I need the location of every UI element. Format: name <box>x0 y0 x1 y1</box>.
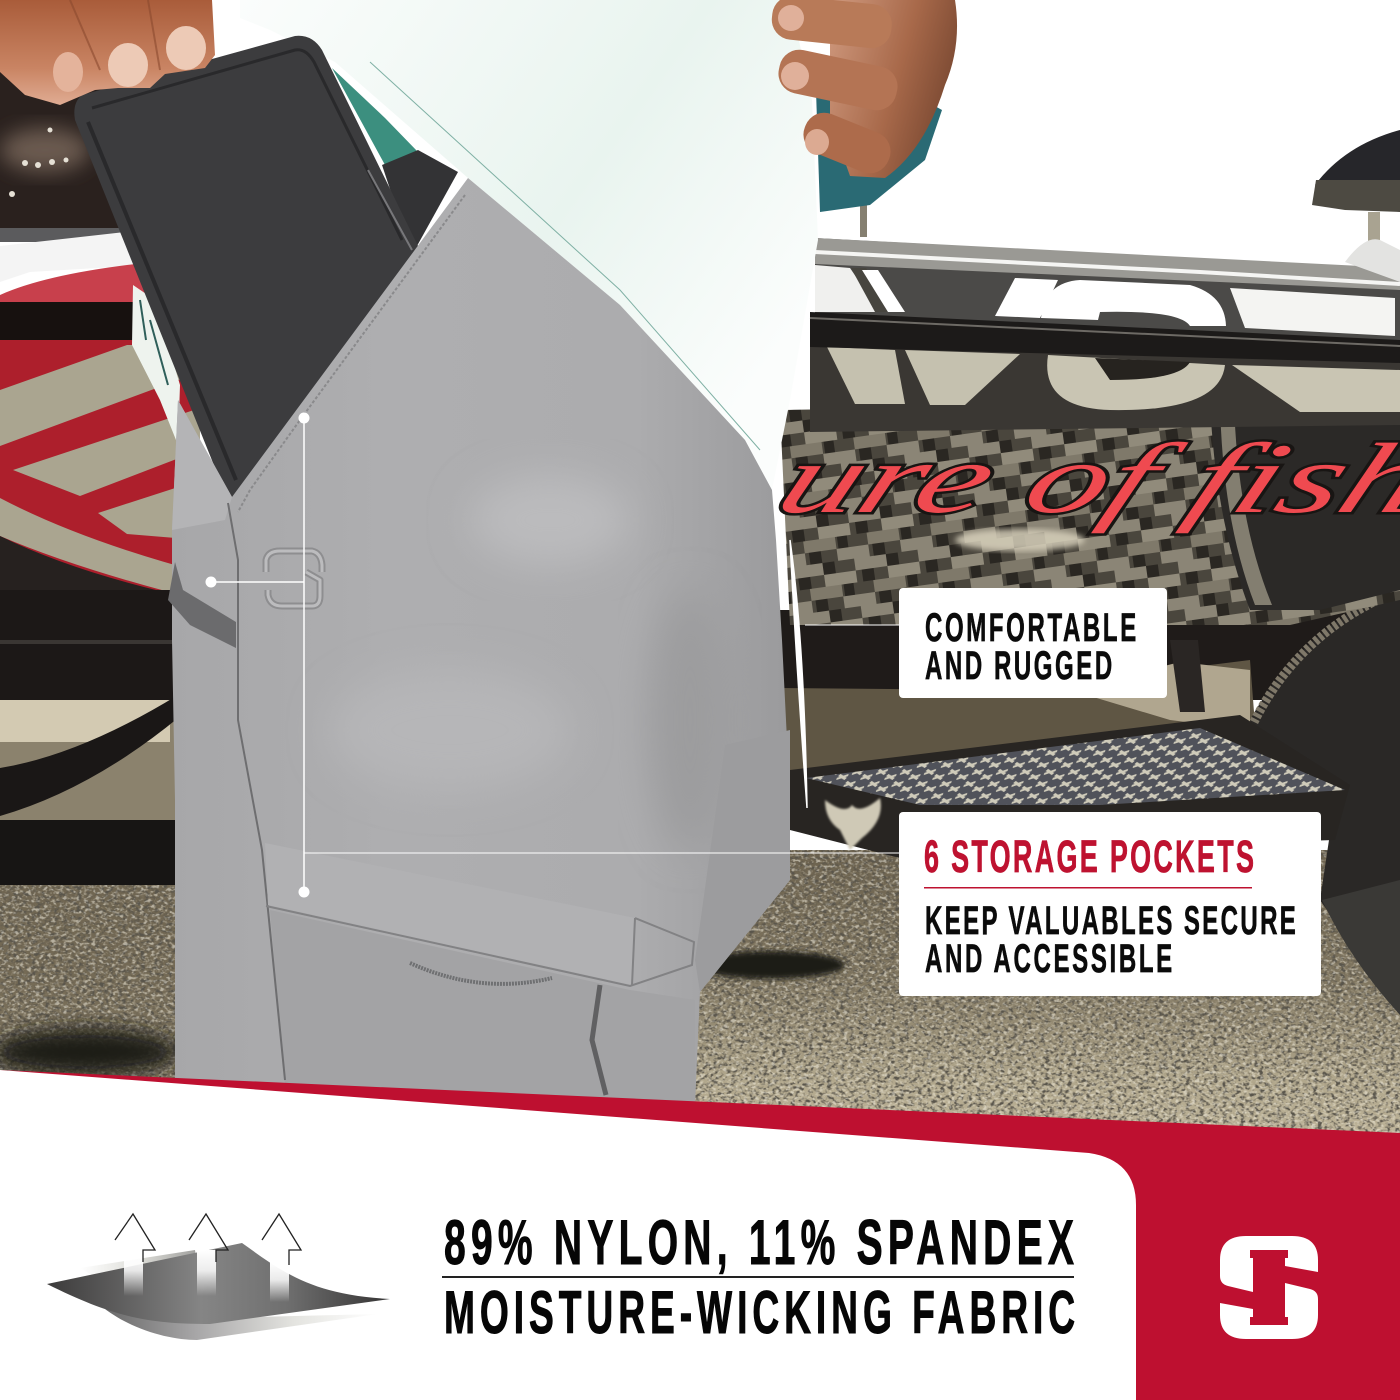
shirt tail left <box>132 285 180 445</box>
white shirt <box>240 0 818 490</box>
wicking arrow 3 <box>262 1214 301 1302</box>
sleeve right <box>815 60 942 212</box>
shorts body <box>172 178 790 1105</box>
white footer panel <box>0 1070 1136 1400</box>
heading: fabric composition: 89% NYLON, 11% SPANDEX <box>444 1209 1074 1278</box>
dark blurred background top left <box>0 70 180 230</box>
embroidered logo <box>266 551 322 606</box>
left boat hull <box>0 228 200 600</box>
boat step plate <box>790 715 1350 858</box>
cargo pocket flap <box>265 843 635 985</box>
side zip pocket <box>168 562 236 648</box>
shorts shading <box>172 400 790 1105</box>
person: shirt, hands, phone and shorts <box>0 0 957 1105</box>
phone <box>74 36 470 520</box>
pole behind the shirt <box>860 205 867 237</box>
boat hull with carbon graphic <box>780 345 1400 625</box>
boat wheel and fender <box>1250 585 1400 1015</box>
callout: 6 storage pockets: AND ACCESSIBLE <box>925 936 1172 980</box>
hand left <box>0 0 215 105</box>
callout leader lines <box>206 412 899 898</box>
callout: comfortable and rugged: AND RUGGED <box>925 643 1112 687</box>
gravel ground <box>0 820 1400 1140</box>
red footer band <box>0 1070 1400 1400</box>
red script lettering on boat: ure of fish <box>763 424 1400 534</box>
heading: fabric composition <box>442 1209 1075 1346</box>
icon: brand logo <box>1220 1236 1318 1339</box>
left under-boat shadow and trailer <box>0 590 200 885</box>
wicking arrow 1 <box>115 1214 155 1296</box>
zipper cord <box>592 985 606 1095</box>
right under-boat area <box>780 610 1400 800</box>
callout: 6 storage pockets: 6 STORAGE POCKETS <box>924 831 1254 882</box>
callout: 6 storage pockets: KEEP VALUABLES SECURE <box>925 898 1296 942</box>
hand right <box>770 0 957 179</box>
undershirt teal and dark <box>332 68 418 165</box>
cargo zipper <box>410 963 552 984</box>
boat seat top right <box>1312 130 1400 282</box>
callout: comfortable and rugged: COMFORTABLE <box>925 605 1136 649</box>
heading: fabric composition: MOISTURE-WICKING FABRIC <box>444 1279 1075 1346</box>
boat top rail with white letters <box>810 238 1400 363</box>
pocket stitch line <box>238 195 465 512</box>
icon: moisture-wicking fabric <box>47 1214 390 1340</box>
callout: comfortable and rugged <box>899 588 1167 698</box>
wicking arrow 2 <box>189 1214 228 1296</box>
callout: 6 storage pockets <box>899 812 1321 996</box>
